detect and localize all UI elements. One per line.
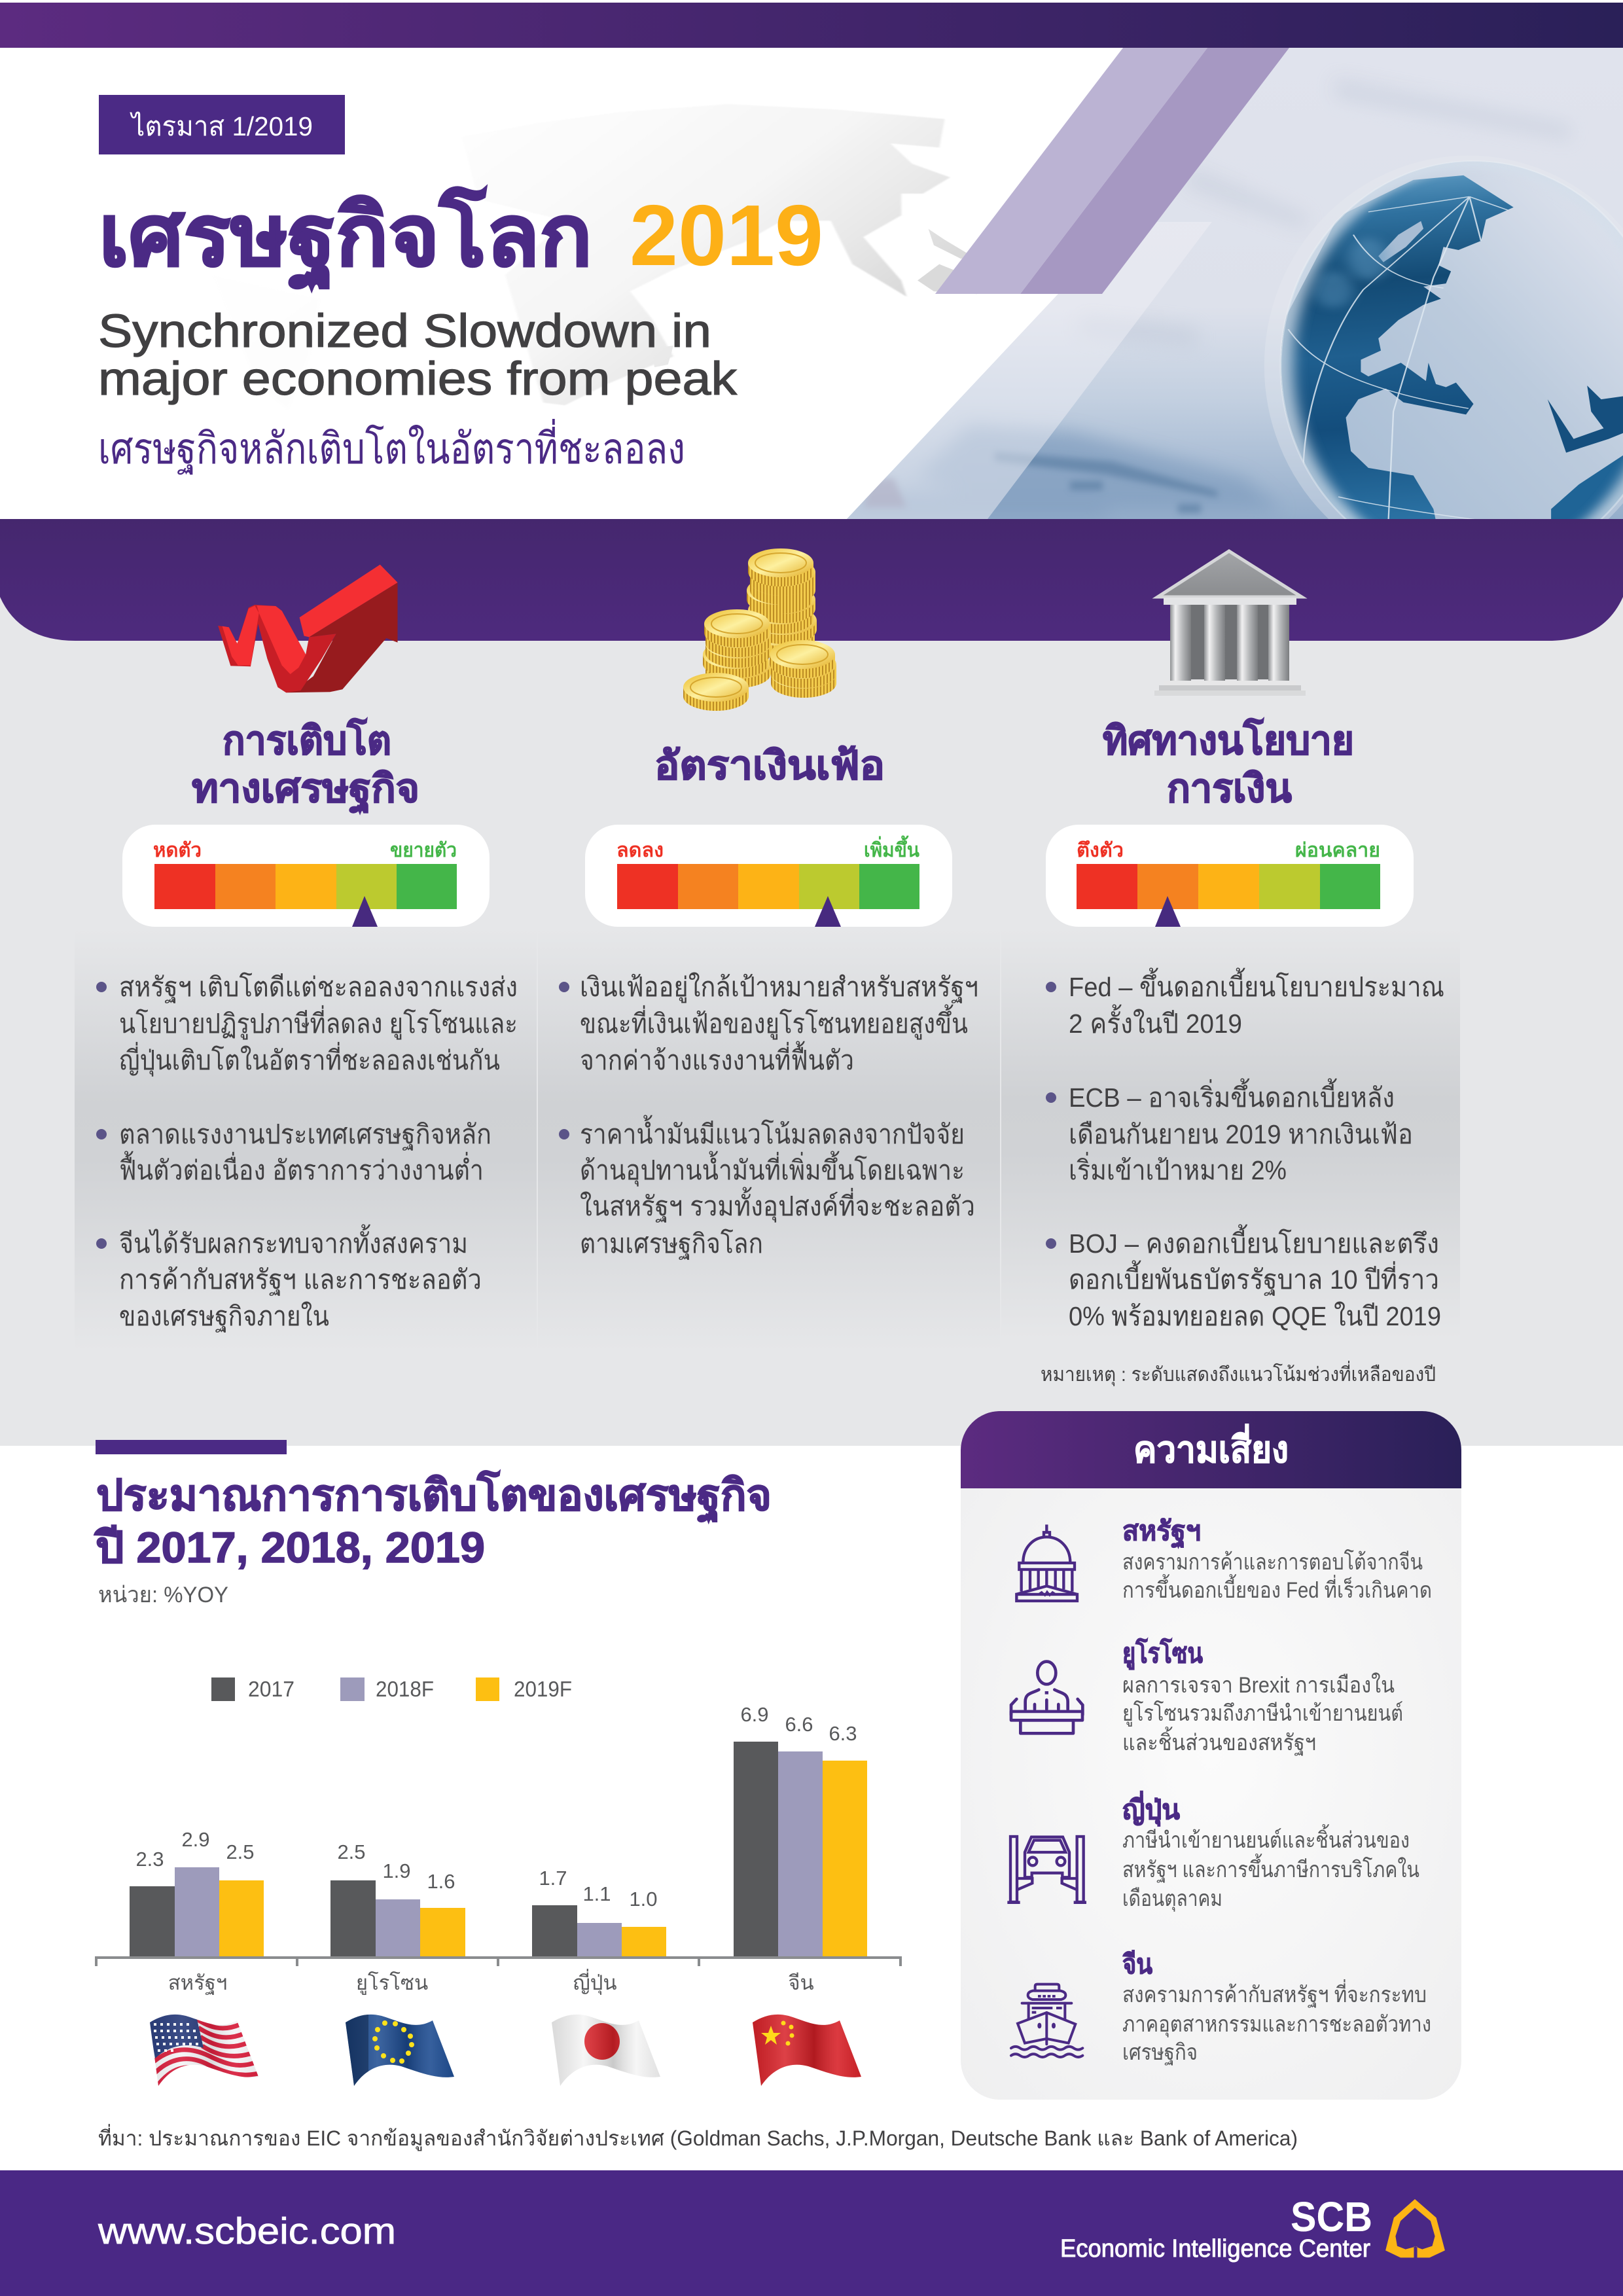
- text block: policy bullets: เดือนกันยายน 2019 หากเงินเฟ้อ: [1069, 1119, 1413, 1149]
- english subtitle: Synchronized Slowdown in: [98, 306, 711, 357]
- bars: US: 2.5: [226, 1840, 255, 1863]
- bars: China: 6.6: [785, 1713, 813, 1736]
- bars: Japan: 1.0: [629, 1888, 658, 1910]
- icon: bank building: [1154, 551, 1306, 696]
- bar chart: [96, 1677, 901, 1996]
- risk item: Eurozone: และชิ้นส่วนของสหรัฐฯ: [1122, 1727, 1316, 1756]
- grey section background: [0, 519, 1623, 1446]
- section accent bar: [96, 1440, 287, 1454]
- heading: monetary policy: [1103, 717, 1354, 810]
- quarter badge: [99, 95, 345, 154]
- panel header: [961, 1411, 1461, 1488]
- category labels: จีน: [788, 1971, 814, 1994]
- heading: economic growth: ทางเศรษฐกิจ: [192, 766, 419, 814]
- risk item: Japan: ญี่ปุ่น: [1122, 1791, 1180, 1827]
- heading: monetary policy: ทิศทางนโยบาย: [1103, 717, 1354, 762]
- chart heading: [94, 1469, 772, 1571]
- gauge: monetary policy: [1046, 825, 1414, 927]
- main title: [99, 187, 823, 291]
- heading: economic growth: การเติบโต: [223, 717, 391, 762]
- source note: ที่มา: ประมาณการของ EIC จากข้อมูลของสำนักวิจัยต่างประเทศ (Goldman Sachs, J.P.Morgan, Deutsche Bank และ Bank of America): [98, 2124, 1298, 2151]
- text block: policy bullets: ดอกเบี้ยพันธบัตรรัฐบาล 10 ปีที่ราว: [1069, 1260, 1439, 1296]
- heading: economic growth: [192, 717, 419, 814]
- legend: 2017: [248, 1677, 294, 1701]
- photo background: [838, 48, 1623, 519]
- risk item: USA: สงครามการค้าและการตอบโต้จากจีน: [1122, 1549, 1423, 1575]
- bars: Japan: 1.1: [582, 1882, 611, 1905]
- top gradient bar: [0, 3, 1623, 48]
- panel: risks: [961, 1411, 1461, 2100]
- icon: growth arrow: [218, 565, 398, 692]
- category labels: [168, 1969, 814, 1996]
- english subtitle: [98, 306, 738, 405]
- main title: 2019: [630, 187, 823, 283]
- bars: US: [130, 1828, 264, 1958]
- text block: inflation bullets: ในสหรัฐฯ รวมทั้งอุปสงค์ที่จะชะลอตัว: [580, 1187, 975, 1223]
- bars: China: [734, 1703, 867, 1958]
- text block: growth bullets: ตลาดแรงงานประเทศเศรษฐกิจหลัก: [119, 1119, 491, 1151]
- bars: Eurozone: [330, 1840, 465, 1958]
- text block: policy bullets: 0% พร้อมทยอยลด QQE ในปี 2019: [1069, 1301, 1441, 1331]
- bars: Eurozone: 2.5: [337, 1840, 366, 1863]
- chart heading: ปี 2017, 2018, 2019: [94, 1523, 485, 1571]
- bars: US: 2.9: [181, 1828, 210, 1851]
- header text: ความเสี่ยง: [1133, 1424, 1289, 1470]
- risk item: Japan: ภาษีนำเข้ายานยนต์และชิ้นส่วนของ: [1122, 1824, 1410, 1853]
- risk item: USA: การขึ้นดอกเบี้ยของ Fed ที่เร็วเกินคาด: [1122, 1574, 1432, 1603]
- bars: US: 2.3: [135, 1848, 164, 1871]
- logo: SCB Economic Intelligence Center: [1060, 2193, 1445, 2263]
- text block: inflation bullets: ด้านอุปทานน้ำมันที่เพิ่มขึ้นโดยเฉพาะ: [580, 1151, 965, 1187]
- world map watermark: [212, 104, 977, 411]
- text block: policy bullets: Fed – ขึ้นดอกเบี้ยนโยบายประมาณ: [1069, 967, 1444, 1002]
- flag: USA: [150, 2015, 259, 2086]
- text block: inflation bullets: ตามเศรษฐกิจโลก: [580, 1229, 763, 1260]
- footnote: หมายเหตุ : ระดับแสดงถึงแนวโน้มช่วงที่เหลือของปี: [1041, 1361, 1436, 1387]
- heading: monetary policy: การเงิน: [1167, 766, 1292, 810]
- risk item: China: เศรษฐกิจ: [1122, 2040, 1198, 2066]
- text block: growth bullets: ญี่ปุ่นเติบโตในอัตราที่ชะลอลงเช่นกัน: [119, 1042, 500, 1077]
- risk item: Eurozone: ยูโรโซนรวมถึงภาษีนำเข้ายานยนต์: [1122, 1700, 1403, 1727]
- english subtitle: major economies from peak: [98, 353, 738, 405]
- icon: coins: [683, 548, 836, 711]
- risk item: Eurozone: ยูโรโซน: [1122, 1638, 1203, 1670]
- risk item: China: ภาคอุตสาหกรรมและการชะลอตัวทาง: [1122, 2012, 1431, 2037]
- gauge: inflation: [585, 825, 952, 927]
- text block: inflation bullets: ขณะที่เงินเฟ้อของยูโรโซนทยอยสูงขึ้น: [580, 1004, 968, 1040]
- gauge: monetary policy: ตึงตัว: [1077, 840, 1124, 861]
- hero banner: [212, 48, 1623, 576]
- bars: China: 6.3: [829, 1722, 857, 1745]
- text block: inflation bullets: [559, 972, 978, 1260]
- risk item: China: จีน: [1122, 1949, 1152, 1979]
- text block: inflation bullets: จากค่าจ้างแรงงานที่ฟื้นตัว: [580, 1041, 854, 1075]
- text block: policy bullets: เริ่มเข้าเป้าหมาย 2%: [1069, 1152, 1287, 1185]
- heading: inflation: อัตราเงินเฟ้อ: [654, 744, 885, 787]
- risk item: Eurozone: [1122, 1638, 1403, 1756]
- text block: policy bullets: [1046, 967, 1444, 1331]
- flag: EU: [346, 2015, 454, 2086]
- risk item: USA: สหรัฐฯ: [1122, 1516, 1201, 1549]
- gauge: inflation: เพิ่มขึ้น: [864, 835, 919, 861]
- icon: ship: [1011, 1984, 1082, 2057]
- website url: www.scbeic.com: [98, 2210, 396, 2252]
- risk item: Japan: เดือนตุลาคม: [1122, 1886, 1222, 1912]
- icon: lotus leaf: [1385, 2199, 1445, 2257]
- text block: inflation bullets: ราคาน้ำมันมีแนวโน้มลดลงจากปัจจัย: [580, 1115, 965, 1149]
- text block: growth bullets: ฟื้นตัวต่อเนื่อง อัตราการว่างงานต่ำ: [119, 1151, 484, 1185]
- text block: growth bullets: ของเศรษฐกิจภายใน: [119, 1301, 329, 1333]
- translucent light panel: [847, 222, 1212, 519]
- risk item: USA: [1122, 1516, 1432, 1603]
- thai subtitle: เศรษฐกิจหลักเติบโตในอัตราที่ชะลอลง: [98, 419, 685, 475]
- gauge: growth: หดตัว: [153, 840, 202, 861]
- purple diagonal bands: [935, 48, 1289, 294]
- category labels: ญี่ปุ่น: [573, 1969, 617, 1996]
- axis: [96, 1958, 901, 1966]
- risk item: Eurozone: ผลการเจรจา Brexit การเมืองใน: [1122, 1672, 1395, 1698]
- risk item: China: สงครามการค้ากับสหรัฐฯ ที่จะกระทบ: [1122, 1979, 1427, 2008]
- quarter badge: ไตรมาส 1/2019: [130, 111, 313, 141]
- unit label: หน่วย: %YOY: [98, 1583, 228, 1607]
- category labels: สหรัฐฯ: [168, 1971, 227, 1995]
- chart heading: ประมาณการการเติบโตของเศรษฐกิจ: [96, 1469, 772, 1523]
- bars: Japan: 1.7: [539, 1867, 567, 1890]
- icon: capitol: [1016, 1524, 1077, 1601]
- text block: growth bullets: สหรัฐฯ เติบโตดีแต่ชะลอลงจากแรงส่ง: [119, 972, 518, 1003]
- main title: เศรษฐกิจโลก: [99, 187, 592, 291]
- bars: Eurozone: 1.6: [427, 1870, 455, 1893]
- flag: Japan: [552, 2015, 660, 2086]
- bars: Eurozone: 1.9: [382, 1859, 411, 1882]
- gauge: growth: ขยายตัว: [390, 840, 457, 861]
- category labels: ยูโรโซน: [356, 1971, 428, 1995]
- text block: growth bullets: จีนได้รับผลกระทบจากทั้งสงคราม: [119, 1224, 468, 1259]
- text block: policy bullets: ECB – อาจเริ่มขึ้นดอกเบี้ยหลัง: [1069, 1078, 1395, 1113]
- gauge: growth: [122, 825, 490, 927]
- panel body: [961, 1411, 1461, 2100]
- logo: SCB Economic Intelligence Center: Economic Intelligence Center: [1060, 2235, 1370, 2263]
- text block: policy bullets: BOJ – คงดอกเบี้ยนโยบายและตรึง: [1069, 1224, 1439, 1259]
- icon: speaker podium: [1011, 1662, 1082, 1733]
- footer bar: [0, 2170, 1623, 2296]
- text block: growth bullets: นโยบายปฏิรูปภาษีที่ลดลง ยูโรโซนและ: [119, 1005, 518, 1040]
- risk item: Japan: [1122, 1791, 1419, 1912]
- logo: SCB Economic Intelligence Center: SCB: [1291, 2193, 1372, 2240]
- legend: [211, 1677, 572, 1701]
- legend: 2018F: [376, 1677, 434, 1701]
- icon: car lift: [1007, 1837, 1086, 1903]
- text block: growth bullets: การค้ากับสหรัฐฯ และการชะลอตัว: [119, 1265, 482, 1296]
- bars: China: 6.9: [740, 1703, 769, 1726]
- text block: growth bullets: [96, 972, 518, 1333]
- column shading panels: [75, 929, 1460, 1388]
- risk item: China: [1122, 1949, 1431, 2066]
- text block: inflation bullets: เงินเฟ้ออยู่ใกล้เป้าหมายสำหรับสหรัฐฯ: [580, 972, 978, 1003]
- text block: policy bullets: 2 ครั้งในปี 2019: [1069, 1004, 1242, 1039]
- risk item: Japan: สหรัฐฯ และการขึ้นภาษีการบริโภคใน: [1122, 1854, 1419, 1883]
- bars: Japan: [532, 1867, 666, 1958]
- gauge: inflation: ลดลง: [616, 840, 664, 861]
- gauge: monetary policy: ผ่อนคลาย: [1295, 840, 1380, 861]
- purple curved band: [0, 519, 1623, 641]
- glass globe: [1264, 161, 1623, 519]
- flag: China: [753, 2015, 861, 2086]
- legend: 2019F: [514, 1677, 572, 1701]
